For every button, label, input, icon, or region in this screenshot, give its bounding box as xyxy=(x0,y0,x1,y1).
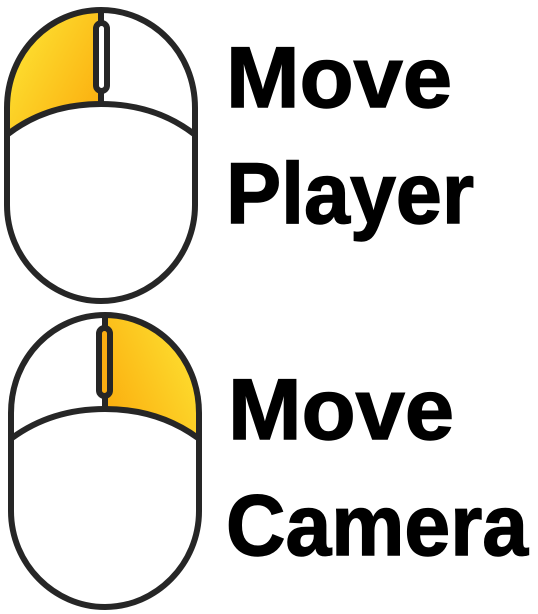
label: Move Camera: Camera xyxy=(226,478,529,574)
label: Move Camera: Move xyxy=(228,362,454,458)
scroll wheel xyxy=(96,23,107,91)
scroll wheel xyxy=(99,328,110,396)
button divider curve xyxy=(12,409,198,438)
label: Move Player: Move xyxy=(226,30,452,126)
label: Move Player xyxy=(226,30,474,242)
right button highlight xyxy=(105,315,199,437)
left button highlight xyxy=(7,10,101,134)
icon: mouse with left button highlighted xyxy=(7,10,195,301)
button divider curve xyxy=(8,104,194,134)
mouse body outline xyxy=(7,10,195,301)
mouse body outline xyxy=(11,315,199,607)
icon: mouse with right button highlighted xyxy=(11,315,199,607)
centre seam xyxy=(98,10,104,104)
centre seam xyxy=(102,315,108,409)
label: Move Player: Player xyxy=(226,146,474,242)
label: Move Camera xyxy=(226,362,529,574)
